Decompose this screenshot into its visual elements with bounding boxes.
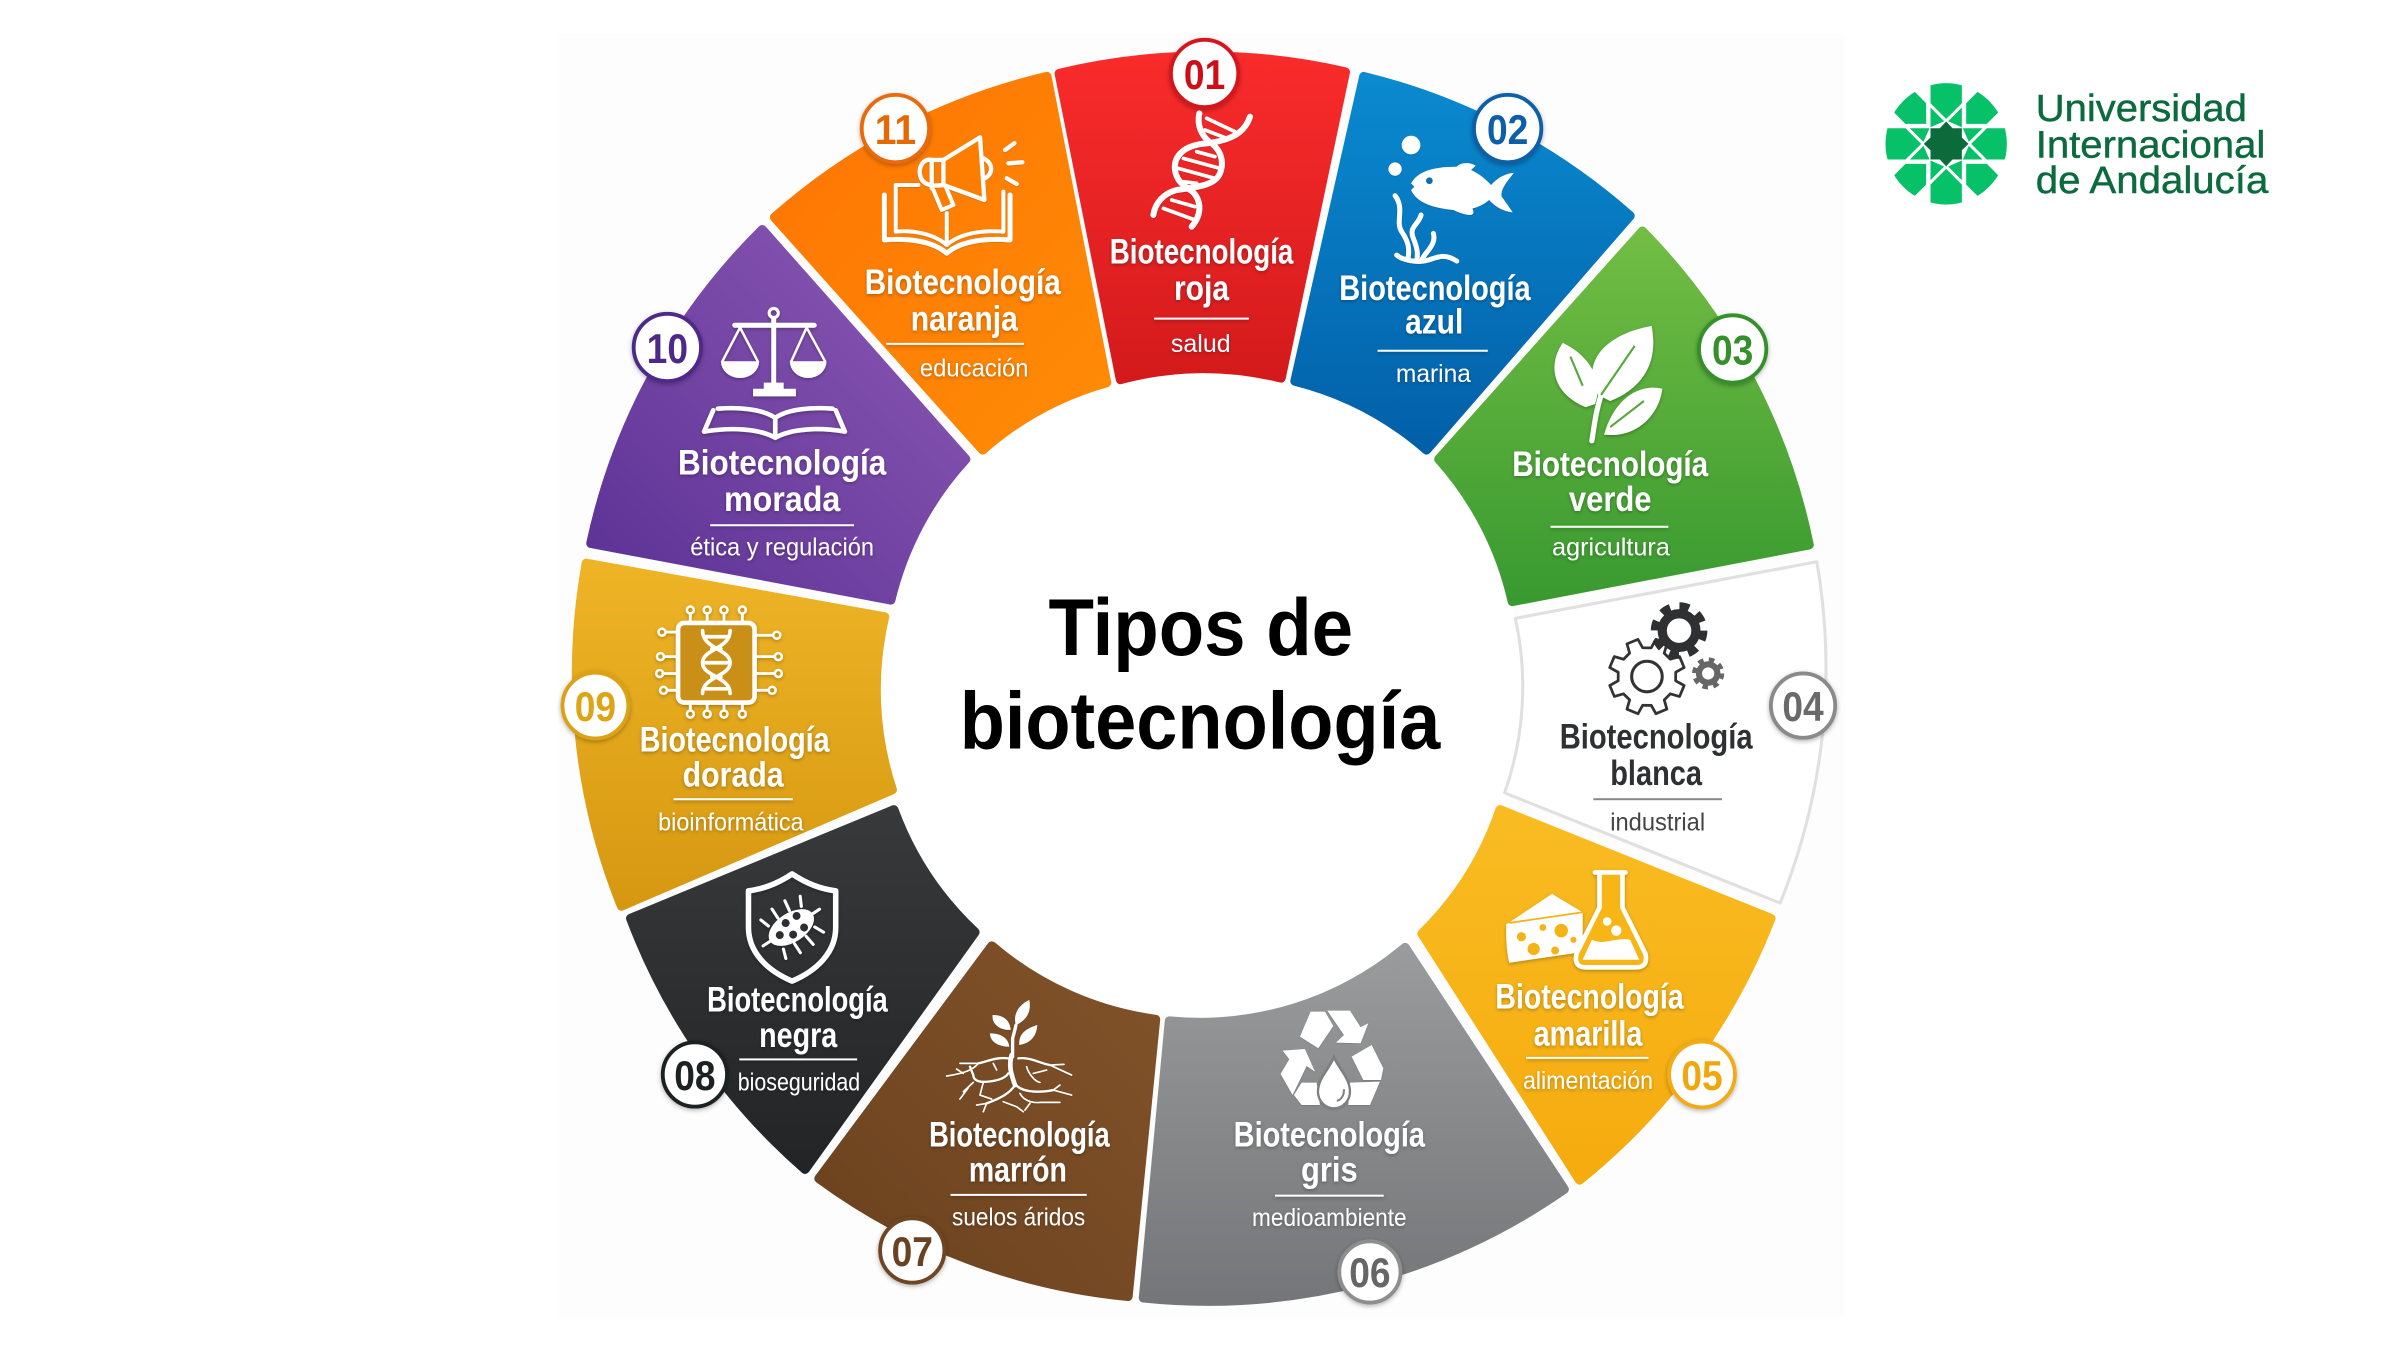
title: biotecnología [960, 676, 1441, 766]
label: alimentación [1523, 1067, 1653, 1095]
icon: DNA helix [1153, 113, 1250, 227]
label: marina [1396, 360, 1472, 388]
icon: fish and seaweed [1388, 136, 1514, 261]
segment shape [1059, 56, 1345, 380]
icon: plant with roots [947, 1000, 1072, 1112]
label: Biotecnología [1110, 232, 1294, 271]
label: Biotecnología [929, 1115, 1110, 1154]
badge 07 [880, 1218, 944, 1283]
badge 10: 10 [647, 326, 688, 372]
badge 06: 06 [1349, 1250, 1391, 1296]
label: Biotecnología [1512, 445, 1709, 484]
label [929, 1115, 1110, 1231]
label [707, 981, 888, 1097]
label [865, 263, 1061, 383]
label: Biotecnología [1339, 269, 1531, 308]
label: salud [1171, 330, 1231, 358]
icon: cheese and flask [1506, 872, 1646, 967]
icon: megaphone and book [884, 137, 1022, 253]
segment shape [774, 77, 1107, 450]
logo wordmark: Internacional [2036, 124, 2265, 167]
label: negra [759, 1016, 838, 1055]
title: Tipos de [1048, 583, 1353, 673]
badge 08: 08 [674, 1053, 716, 1099]
label: morada [724, 480, 841, 519]
badge 07: 07 [892, 1229, 933, 1275]
segment shape [1143, 947, 1564, 1301]
badge 11: 11 [875, 107, 916, 153]
logo wordmark: de Andalucía [2036, 159, 2269, 202]
label: naranja [911, 300, 1018, 339]
badge 09: 09 [575, 684, 616, 730]
badge 11 [862, 95, 929, 162]
badge 08 [663, 1042, 727, 1107]
logo wordmark [2036, 87, 2269, 202]
label: bioseguridad [738, 1069, 860, 1097]
badge 03: 03 [1712, 327, 1753, 373]
label: azul [1405, 303, 1463, 342]
panel: 10 Biotecnología morada [591, 230, 966, 600]
badge 05: 05 [1681, 1053, 1723, 1099]
label [1234, 1115, 1425, 1232]
label: suelos áridos [952, 1203, 1085, 1231]
logo wordmark: Universidad [2036, 87, 2247, 130]
label [1495, 978, 1684, 1095]
panel: 04 Biotecnología blanca [1505, 562, 1835, 903]
label: educación [920, 355, 1029, 383]
label: roja [1174, 269, 1229, 308]
label: amarilla [1534, 1014, 1643, 1053]
label: verde [1569, 480, 1652, 519]
label [1512, 445, 1709, 562]
badge 06 [1339, 1241, 1401, 1303]
label [640, 721, 830, 836]
panel: 02 Biotecnología azul [1295, 77, 1630, 450]
panel: 08 Biotecnología negra [631, 810, 975, 1169]
logo: Universidad Internacional de Andalucía [1883, 81, 2269, 207]
label: gris [1301, 1151, 1358, 1190]
icon: leaves [1554, 326, 1662, 441]
panel: 03 Biotecnología verde [1439, 231, 1809, 602]
label: Biotecnología [640, 721, 830, 760]
icon: scales and book [704, 308, 845, 438]
label: Biotecnología [1234, 1115, 1425, 1154]
badge 02: 02 [1487, 107, 1528, 153]
infographic canvas [558, 36, 2269, 1309]
panel: 01 Biotecnología roja [1059, 40, 1345, 380]
title [960, 583, 1441, 766]
label [678, 443, 887, 562]
segment shape [1295, 77, 1630, 450]
segment shape [576, 563, 892, 906]
icon: shield with microbe [748, 874, 836, 981]
panel: 09 Biotecnología dorada [562, 563, 892, 906]
badge 04 [1771, 673, 1835, 738]
segment shape [1422, 810, 1771, 1180]
label: Biotecnología [678, 443, 887, 482]
label: agricultura [1552, 534, 1671, 562]
icon: chip with DNA [656, 606, 782, 718]
segment shape [1505, 562, 1826, 903]
icon: logo emblem [1883, 81, 2010, 207]
label: blanca [1610, 754, 1702, 793]
panel: 06 Biotecnología gris [1143, 947, 1564, 1303]
label [1560, 717, 1753, 836]
badge 03 [1699, 315, 1766, 383]
badge 05 [1669, 1042, 1735, 1107]
label: bioinformática [658, 808, 804, 836]
segment shape [819, 946, 1156, 1296]
label: marrón [969, 1151, 1067, 1190]
label: ética y regulación [690, 534, 874, 562]
badge 02 [1474, 95, 1541, 162]
panel: 11 Biotecnología naranja [774, 77, 1107, 450]
badge 01: 01 [1184, 52, 1225, 98]
badge 04: 04 [1782, 684, 1824, 730]
icon: recycle with drop [1281, 1011, 1383, 1108]
segment shape [1439, 231, 1809, 602]
label: Biotecnología [865, 263, 1061, 302]
label [1110, 232, 1294, 358]
badge 09 [562, 673, 628, 739]
label: Biotecnología [707, 981, 888, 1020]
label: dorada [683, 756, 784, 795]
segment shape [591, 230, 966, 600]
segment shape [631, 810, 975, 1169]
badge 10 [634, 314, 701, 381]
label [1339, 269, 1531, 388]
label: Biotecnología [1560, 717, 1753, 756]
label: industrial [1610, 808, 1705, 836]
icon: gears [1598, 608, 1721, 726]
badge 01 [1171, 40, 1238, 107]
label: medioambiente [1252, 1204, 1407, 1232]
panel: 07 Biotecnología marrón [819, 946, 1156, 1296]
panel: 05 Biotecnología amarilla [1422, 810, 1771, 1180]
label: Biotecnología [1495, 978, 1684, 1017]
